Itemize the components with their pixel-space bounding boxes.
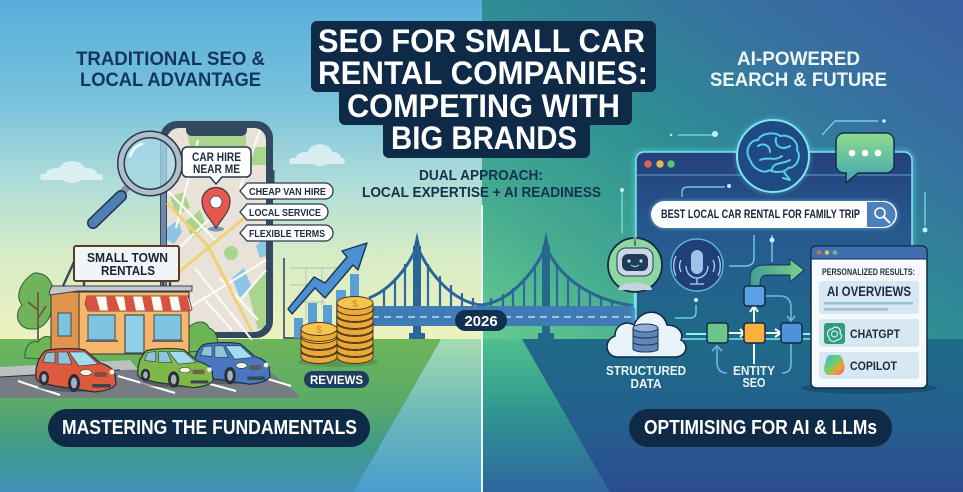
- title text: SEO FOR SMALL CAR: [318, 23, 645, 59]
- left diagonal wedge: [353, 339, 482, 492]
- row: AI overviews: [819, 281, 919, 314]
- cloud database icon: [607, 312, 686, 357]
- icon: brain: [735, 118, 811, 194]
- right sky background: [482, 0, 963, 340]
- year badge: [455, 310, 507, 331]
- magnifier lens: [121, 134, 179, 192]
- pill: optimising for AI: [629, 409, 892, 447]
- tag: flexible terms: [240, 225, 333, 241]
- tag: local service: LOCAL SERVICE: [249, 207, 321, 219]
- store sills: [86, 340, 183, 342]
- callout: car hire near me: [182, 147, 251, 184]
- row: Copilot: [819, 352, 919, 379]
- card title bar: [811, 246, 927, 259]
- store front wall: [79, 292, 189, 354]
- bush right: [188, 322, 218, 352]
- bridge hangers: [384, 264, 612, 306]
- search query: BEST LOCAL CAR RENTAL FOR FAMILY TRIP: [661, 207, 860, 221]
- label: entity SEO: [733, 364, 776, 390]
- chart bars: [294, 274, 359, 338]
- road dashes: [372, 316, 634, 318]
- cloud right: [289, 144, 345, 166]
- card heading: PERSONALIZED RESULTS:: [822, 267, 915, 277]
- window panel: [636, 152, 912, 339]
- map main roads: [167, 203, 252, 332]
- bridge: [369, 232, 637, 339]
- icon: robot: [608, 237, 662, 308]
- tag: cheap van hire: [240, 183, 333, 199]
- red car: [36, 349, 116, 392]
- card shadow: [801, 382, 937, 394]
- circuit decorations: [620, 119, 928, 318]
- subtitle: LOCAL EXPERTISE + AI READINESS: [362, 184, 601, 201]
- store windows: [58, 313, 181, 340]
- label: entity SEO: ENTITY: [733, 364, 776, 378]
- right diagonal wedge: [482, 339, 610, 492]
- store sign posts: [63, 262, 170, 287]
- tag: cheap van hire: CHEAP VAN HIRE: [249, 186, 326, 198]
- pill: mastering the fundamentals: MASTERING THE FUNDAMENTALS: [62, 417, 357, 439]
- heading: AI-powered search: [710, 48, 887, 91]
- title text: [318, 23, 648, 156]
- center divider line: [481, 205, 483, 492]
- icon: chat bubble: [836, 133, 894, 183]
- bridge deck: [369, 306, 637, 326]
- coin stacks: [298, 296, 378, 367]
- title backing: [311, 21, 656, 158]
- store name: RENTALS: [101, 264, 155, 278]
- row: ChatGPT: CHATGPT: [850, 327, 901, 341]
- tree: [17, 273, 53, 340]
- map water: [167, 220, 266, 298]
- browser window: [636, 152, 912, 339]
- pill: optimising for AI: OPTIMISING FOR AI & LLMs: [644, 417, 877, 439]
- heading: AI-powered search: AI-POWERED: [737, 48, 860, 70]
- cloud left: [40, 161, 103, 183]
- store door: [125, 315, 144, 353]
- store roof: [49, 286, 192, 295]
- search bar: [651, 201, 897, 228]
- bush left: [25, 336, 62, 360]
- label: structured data: STRUCTURED: [606, 364, 686, 378]
- callout: car hire near me: CAR HIRE: [192, 150, 241, 164]
- bridge cables: [369, 246, 636, 306]
- heading: traditional SEO: TRADITIONAL SEO &: [76, 48, 265, 70]
- green car: [138, 349, 213, 388]
- curved green arrow: [750, 259, 804, 286]
- label: structured data: DATA: [630, 377, 662, 391]
- chart grid: [290, 268, 340, 320]
- label: entity SEO: SEO: [742, 376, 766, 390]
- title: [311, 21, 656, 158]
- callout: car hire near me: NEAR ME: [193, 162, 240, 176]
- store side wall: [51, 292, 79, 352]
- title text: RENTAL COMPANIES:: [318, 55, 648, 91]
- phone side buttons: [272, 170, 274, 200]
- store sign: [74, 246, 179, 281]
- store: [49, 246, 192, 354]
- magnifier handle: [119, 186, 128, 197]
- left ground panel: [0, 339, 441, 492]
- title text: COMPETING WITH: [347, 88, 620, 124]
- growth chart: [284, 243, 367, 338]
- store name: SMALL TOWN: [87, 251, 168, 265]
- row: Copilot: COPILOT: [850, 359, 898, 373]
- phone with map: [160, 121, 274, 340]
- tag: local service: [240, 204, 328, 220]
- row: ChatGPT: [819, 319, 919, 347]
- node squares: [707, 286, 802, 343]
- phone side band: [161, 140, 166, 320]
- bridge towers: [409, 232, 554, 339]
- growth arrow: [288, 243, 367, 314]
- map streets: [167, 130, 266, 340]
- window header rule: [637, 174, 911, 176]
- phone body: [160, 121, 273, 338]
- store name: [87, 251, 168, 278]
- window dots: [644, 160, 675, 168]
- phone notch: [186, 128, 247, 136]
- right dark ground panel: [522, 339, 963, 492]
- left coin stack: $: [316, 325, 322, 336]
- map screen: [167, 128, 266, 332]
- row: AI overviews: AI OVERVIEWS: [827, 284, 911, 299]
- heading: traditional SEO: LOCAL ADVANTAGE: [80, 69, 261, 91]
- reviews badge: REVIEWS: [310, 373, 363, 387]
- location pin: [202, 188, 230, 232]
- year badge: 2026: [464, 313, 498, 330]
- road and parking lot: [0, 360, 299, 398]
- card body: [811, 246, 927, 388]
- tag: flexible terms: FLEXIBLE TERMS: [249, 228, 325, 240]
- results card: [801, 246, 937, 394]
- pill: mastering the fundamentals: [48, 409, 370, 447]
- blue car: [194, 343, 270, 384]
- magnifying glass: [93, 134, 179, 223]
- network connectors: [686, 296, 812, 373]
- window glow: [636, 152, 912, 339]
- chart axes: [284, 258, 345, 338]
- title text: BIG BRANDS: [391, 120, 577, 156]
- label: structured data: [606, 364, 686, 391]
- heading: AI-powered search: SEARCH & FUTURE: [710, 69, 887, 91]
- subtitle: [362, 167, 601, 201]
- subtitle: DUAL APPROACH:: [419, 167, 543, 184]
- map parks: [170, 129, 266, 330]
- icon: microphone: [671, 239, 723, 291]
- store awning: [85, 296, 192, 311]
- right coin stack: $: [352, 299, 358, 310]
- heading: traditional SEO: [76, 48, 265, 91]
- left sky background: [0, 0, 482, 340]
- search button: [867, 202, 896, 227]
